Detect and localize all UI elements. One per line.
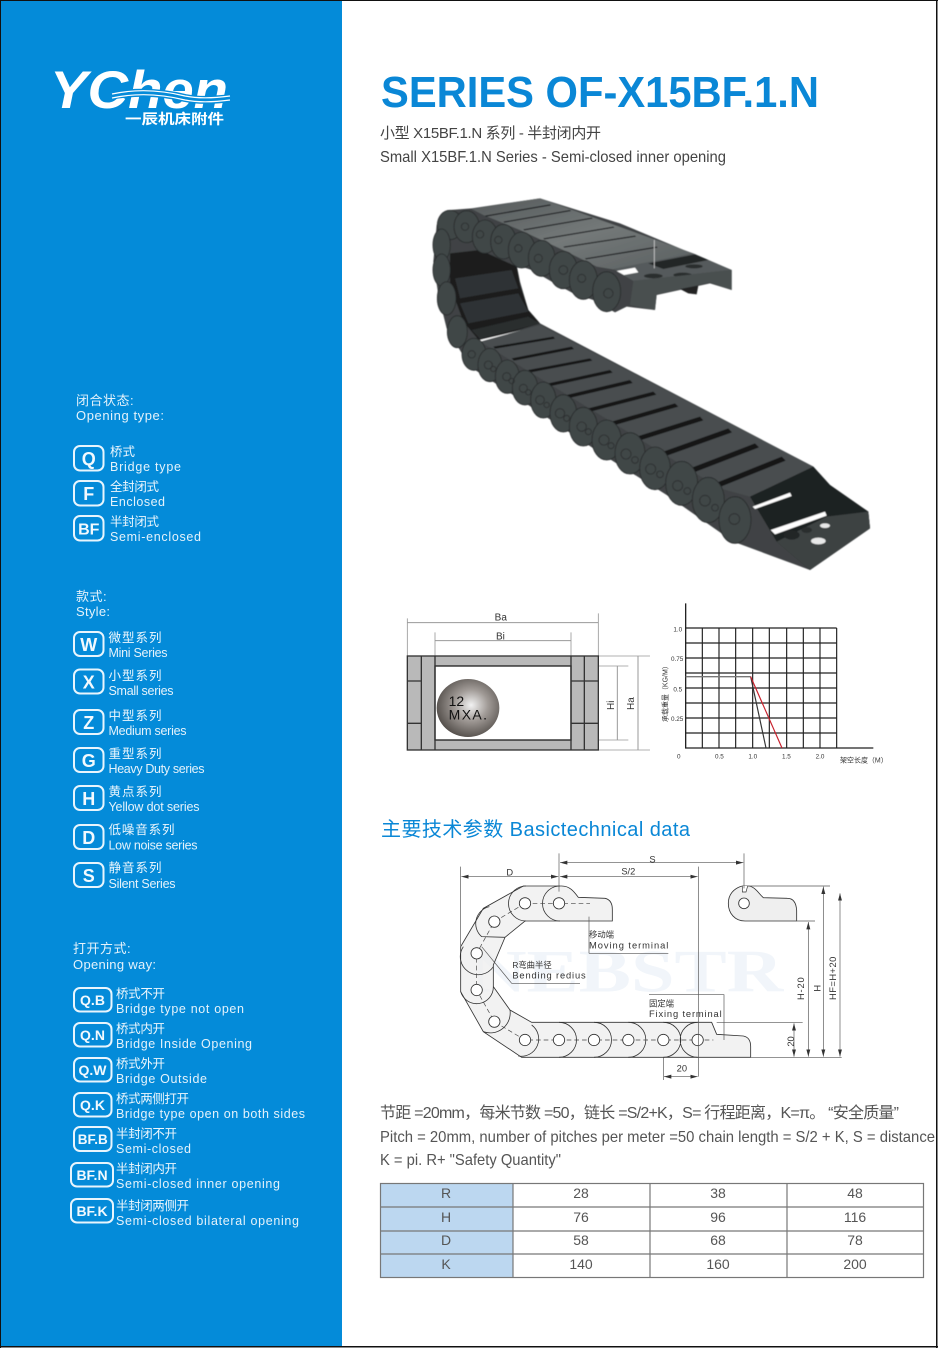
option: BF.K: BF.K — [76, 1203, 108, 1219]
row K: K — [441, 1256, 451, 1272]
logo: YChen: YChen — [50, 61, 228, 120]
subtitle: English: Small X15BF.1.N Series - Semi-closed inner opening — [380, 149, 726, 166]
dimension and callout labels: R弯曲半径 — [512, 960, 552, 970]
dimension and callout labels: HF=H+20 — [828, 957, 838, 1000]
option: G heavy duty: G — [82, 751, 96, 771]
option: W mini: Mini Series — [108, 646, 168, 660]
chart axis labels: 0 — [677, 754, 681, 761]
option: Z medium: Z — [83, 713, 94, 733]
option: Q.B: Bridge type not open — [116, 1002, 244, 1016]
option: Q.K: Q.K — [80, 1097, 105, 1113]
dimension and callout labels: D — [506, 867, 513, 877]
chart axis labels: 2.0 — [816, 754, 825, 761]
chart axis labels: 1.5 — [782, 754, 791, 761]
option: Q.W: Q.W — [78, 1062, 107, 1078]
notes text — [380, 1104, 935, 1169]
option: X small: Small series — [108, 684, 174, 698]
row H: 96 — [710, 1209, 726, 1225]
dimension and callout labels: Moving terminal — [589, 940, 668, 950]
option: BF.N: 半封闭内开 — [116, 1162, 177, 1176]
section: style: Style: — [76, 604, 110, 619]
chart axis labels: 1.0 — [673, 626, 683, 633]
dimension lines — [461, 853, 842, 1080]
option: S silent — [74, 860, 176, 891]
option: BF.N — [71, 1162, 280, 1191]
option: H yellow dot — [74, 785, 200, 814]
option: Q bridge type: 桥式 — [110, 445, 135, 459]
option: F enclosed: F — [83, 484, 94, 504]
row D: 68 — [710, 1232, 726, 1248]
chain dimension diagram — [460, 853, 842, 1080]
option: Z medium: Medium series — [108, 724, 186, 738]
option: G heavy duty: Heavy Duty series — [108, 762, 204, 776]
dimension and callout labels: Bending redius — [512, 971, 586, 981]
dimension labels: Bi — [496, 631, 505, 642]
right terminal outline — [728, 886, 797, 921]
row R: 48 — [847, 1185, 863, 1201]
option: G heavy duty: 重型系列 — [108, 746, 162, 761]
row D — [441, 1232, 863, 1248]
notes text: K = pi. R+ "Safety Quantity" — [380, 1152, 561, 1169]
option: W mini: W — [80, 635, 97, 655]
option: BF.N: Semi-closed inner opening — [116, 1177, 280, 1191]
section: style — [74, 589, 204, 891]
option: H yellow dot: 黄点系列 — [108, 785, 162, 799]
chart axis labels: 0.75 — [671, 656, 684, 663]
option: Q.N: Q.N — [80, 1027, 105, 1043]
row R: 38 — [710, 1185, 726, 1201]
cross-section diagram — [407, 613, 650, 750]
option: BF semi-enclosed: BF — [78, 522, 100, 538]
chart axis labels: 架空长度（M） — [840, 755, 888, 764]
chart axis labels: 承载重量（KG/M） — [660, 662, 669, 722]
option: BF semi-enclosed — [74, 515, 201, 544]
option: X small — [74, 669, 174, 698]
option: W mini: 微型系列 — [108, 631, 162, 645]
row H: H — [441, 1209, 451, 1225]
option: BF.N: BF.N — [76, 1167, 108, 1183]
option: Q.K — [74, 1092, 305, 1121]
option: S silent: 静音系列 — [108, 860, 162, 875]
row D: 58 — [573, 1232, 589, 1248]
sphere: 12 MXA.: MXA. — [449, 707, 487, 723]
dimension and callout labels: 固定端 — [649, 999, 674, 1009]
section: opening type: Opening type: — [76, 408, 164, 423]
chart axis labels: 0.5 — [715, 754, 724, 761]
option: Q.W — [74, 1057, 207, 1086]
row R — [441, 1185, 863, 1201]
section: opening type — [74, 393, 201, 544]
notes text: 节距 =20mm，每米节数 =50，链长 =S/2+K，S= 行程距离，K=π。 “安全质量” — [380, 1104, 899, 1122]
logo: YChen: 一辰机床附件 — [125, 111, 224, 127]
dimension and callout labels: 20 — [677, 1063, 687, 1073]
option: BF.B: 半封闭不开 — [116, 1127, 177, 1141]
chart axis labels — [660, 626, 888, 764]
option: F enclosed — [74, 479, 165, 509]
row H: 116 — [844, 1209, 866, 1225]
side links — [433, 210, 751, 543]
dimension and callout labels — [506, 854, 838, 1073]
dimension and callout labels: 20 — [786, 1036, 796, 1047]
option: Q bridge type: Q — [82, 449, 96, 469]
chart axis labels: 0.25 — [671, 716, 684, 723]
row R: R — [441, 1185, 451, 1201]
option: S silent: S — [83, 866, 95, 886]
curve inner surface — [450, 250, 540, 342]
option: Q.B — [74, 987, 244, 1016]
dimension labels: Ba — [495, 613, 507, 624]
section: style: 款式: — [76, 589, 107, 604]
chart axis labels: 1.0 — [748, 754, 758, 761]
watermark: NEBSTR — [470, 939, 784, 1005]
option: Z medium — [74, 708, 186, 738]
option: D low noise: 低噪音系列 — [108, 822, 174, 837]
option: H yellow dot: H — [82, 789, 95, 809]
dimension labels: Ha — [626, 697, 637, 710]
option: Q.K: Bridge type open on both sides — [116, 1107, 305, 1121]
option: BF.B: Semi-closed — [116, 1142, 191, 1156]
option: Q.N: 桥式内开 — [116, 1022, 165, 1036]
lower run slats — [480, 325, 813, 497]
dimension and callout labels: 移动端 — [589, 929, 614, 939]
option: BF.K — [71, 1199, 299, 1228]
load chart — [660, 603, 888, 764]
option: BF semi-enclosed: 半封闭式 — [110, 515, 159, 529]
row D: D — [441, 1232, 451, 1248]
lower end bracket — [750, 467, 870, 570]
option: G heavy duty — [74, 746, 204, 776]
dimension and callout labels: H — [813, 985, 823, 992]
option: BF.K: 半封闭两侧开 — [116, 1199, 189, 1213]
section: opening way — [71, 941, 305, 1228]
chart axis labels: 0.5 — [673, 686, 683, 693]
option: Q bridge type: Bridge type — [110, 460, 181, 474]
chain outline — [460, 886, 751, 1057]
option: D low noise: D — [82, 828, 95, 848]
row K: 160 — [706, 1256, 730, 1272]
subtitle: Chinese: 小型 X15BF.1.N 系列 - 半封闭内开 — [380, 125, 601, 142]
dimension and callout labels: Fixing terminal — [649, 1009, 722, 1019]
option: D low noise: Low noise series — [108, 838, 198, 852]
option: BF.K: Semi-closed bilateral opening — [116, 1214, 299, 1228]
option: Z medium: 中型系列 — [108, 708, 162, 723]
sphere: 12 MXA.: 12 — [449, 693, 464, 709]
dimension and callout labels: S — [649, 854, 656, 864]
option: D low noise — [74, 822, 198, 852]
sphere: 12 MXA. — [437, 679, 499, 737]
dimension and callout labels: S/2 — [621, 867, 635, 877]
row H: 76 — [573, 1209, 589, 1225]
option: Q.W: 桥式外开 — [116, 1057, 165, 1071]
option: Q bridge type — [74, 445, 181, 474]
section: opening way: 打开方式: — [73, 941, 131, 956]
option: Q.N: Bridge Inside Opening — [116, 1037, 252, 1051]
option: Q.N — [74, 1022, 252, 1051]
title: SERIES OF-X15BF.1.N — [381, 68, 819, 117]
product image: cable drag chain — [433, 198, 870, 570]
row K — [441, 1256, 867, 1272]
option: Q.B: 桥式不开 — [116, 987, 165, 1001]
option: Q.K: 桥式两侧打开 — [116, 1092, 189, 1106]
row H — [441, 1209, 866, 1225]
row D: 78 — [847, 1232, 863, 1248]
option: F enclosed: 全封闭式 — [110, 479, 159, 494]
option: BF.B: BF.B — [78, 1132, 108, 1147]
dimension labels: Hi — [606, 701, 617, 710]
parameter table — [380, 1183, 924, 1278]
option: Q.W: Bridge Outside — [116, 1072, 207, 1086]
option: Q.B: Q.B — [80, 992, 105, 1008]
row K: 200 — [843, 1256, 867, 1272]
option: F enclosed: Enclosed — [110, 495, 165, 509]
row R: 28 — [573, 1185, 589, 1201]
option: BF.B — [74, 1127, 191, 1156]
row K: 140 — [569, 1256, 593, 1272]
section: opening way: Opening way: — [73, 957, 156, 972]
option: BF semi-enclosed: Semi-enclosed — [110, 530, 201, 544]
option: X small: X — [83, 672, 95, 692]
option: S silent: Silent Series — [108, 877, 176, 891]
section heading: basic technical data: 主要技术参数 Basictechnical data — [381, 818, 691, 841]
option: X small: 小型系列 — [108, 669, 162, 683]
dimension labels — [495, 613, 637, 710]
option: H yellow dot: Yellow dot series — [108, 800, 200, 814]
section: opening type: 闭合状态: — [76, 393, 134, 408]
option: W mini — [74, 631, 168, 660]
dimension and callout labels: H-20 — [796, 977, 806, 1000]
upper run top surface — [472, 198, 732, 310]
